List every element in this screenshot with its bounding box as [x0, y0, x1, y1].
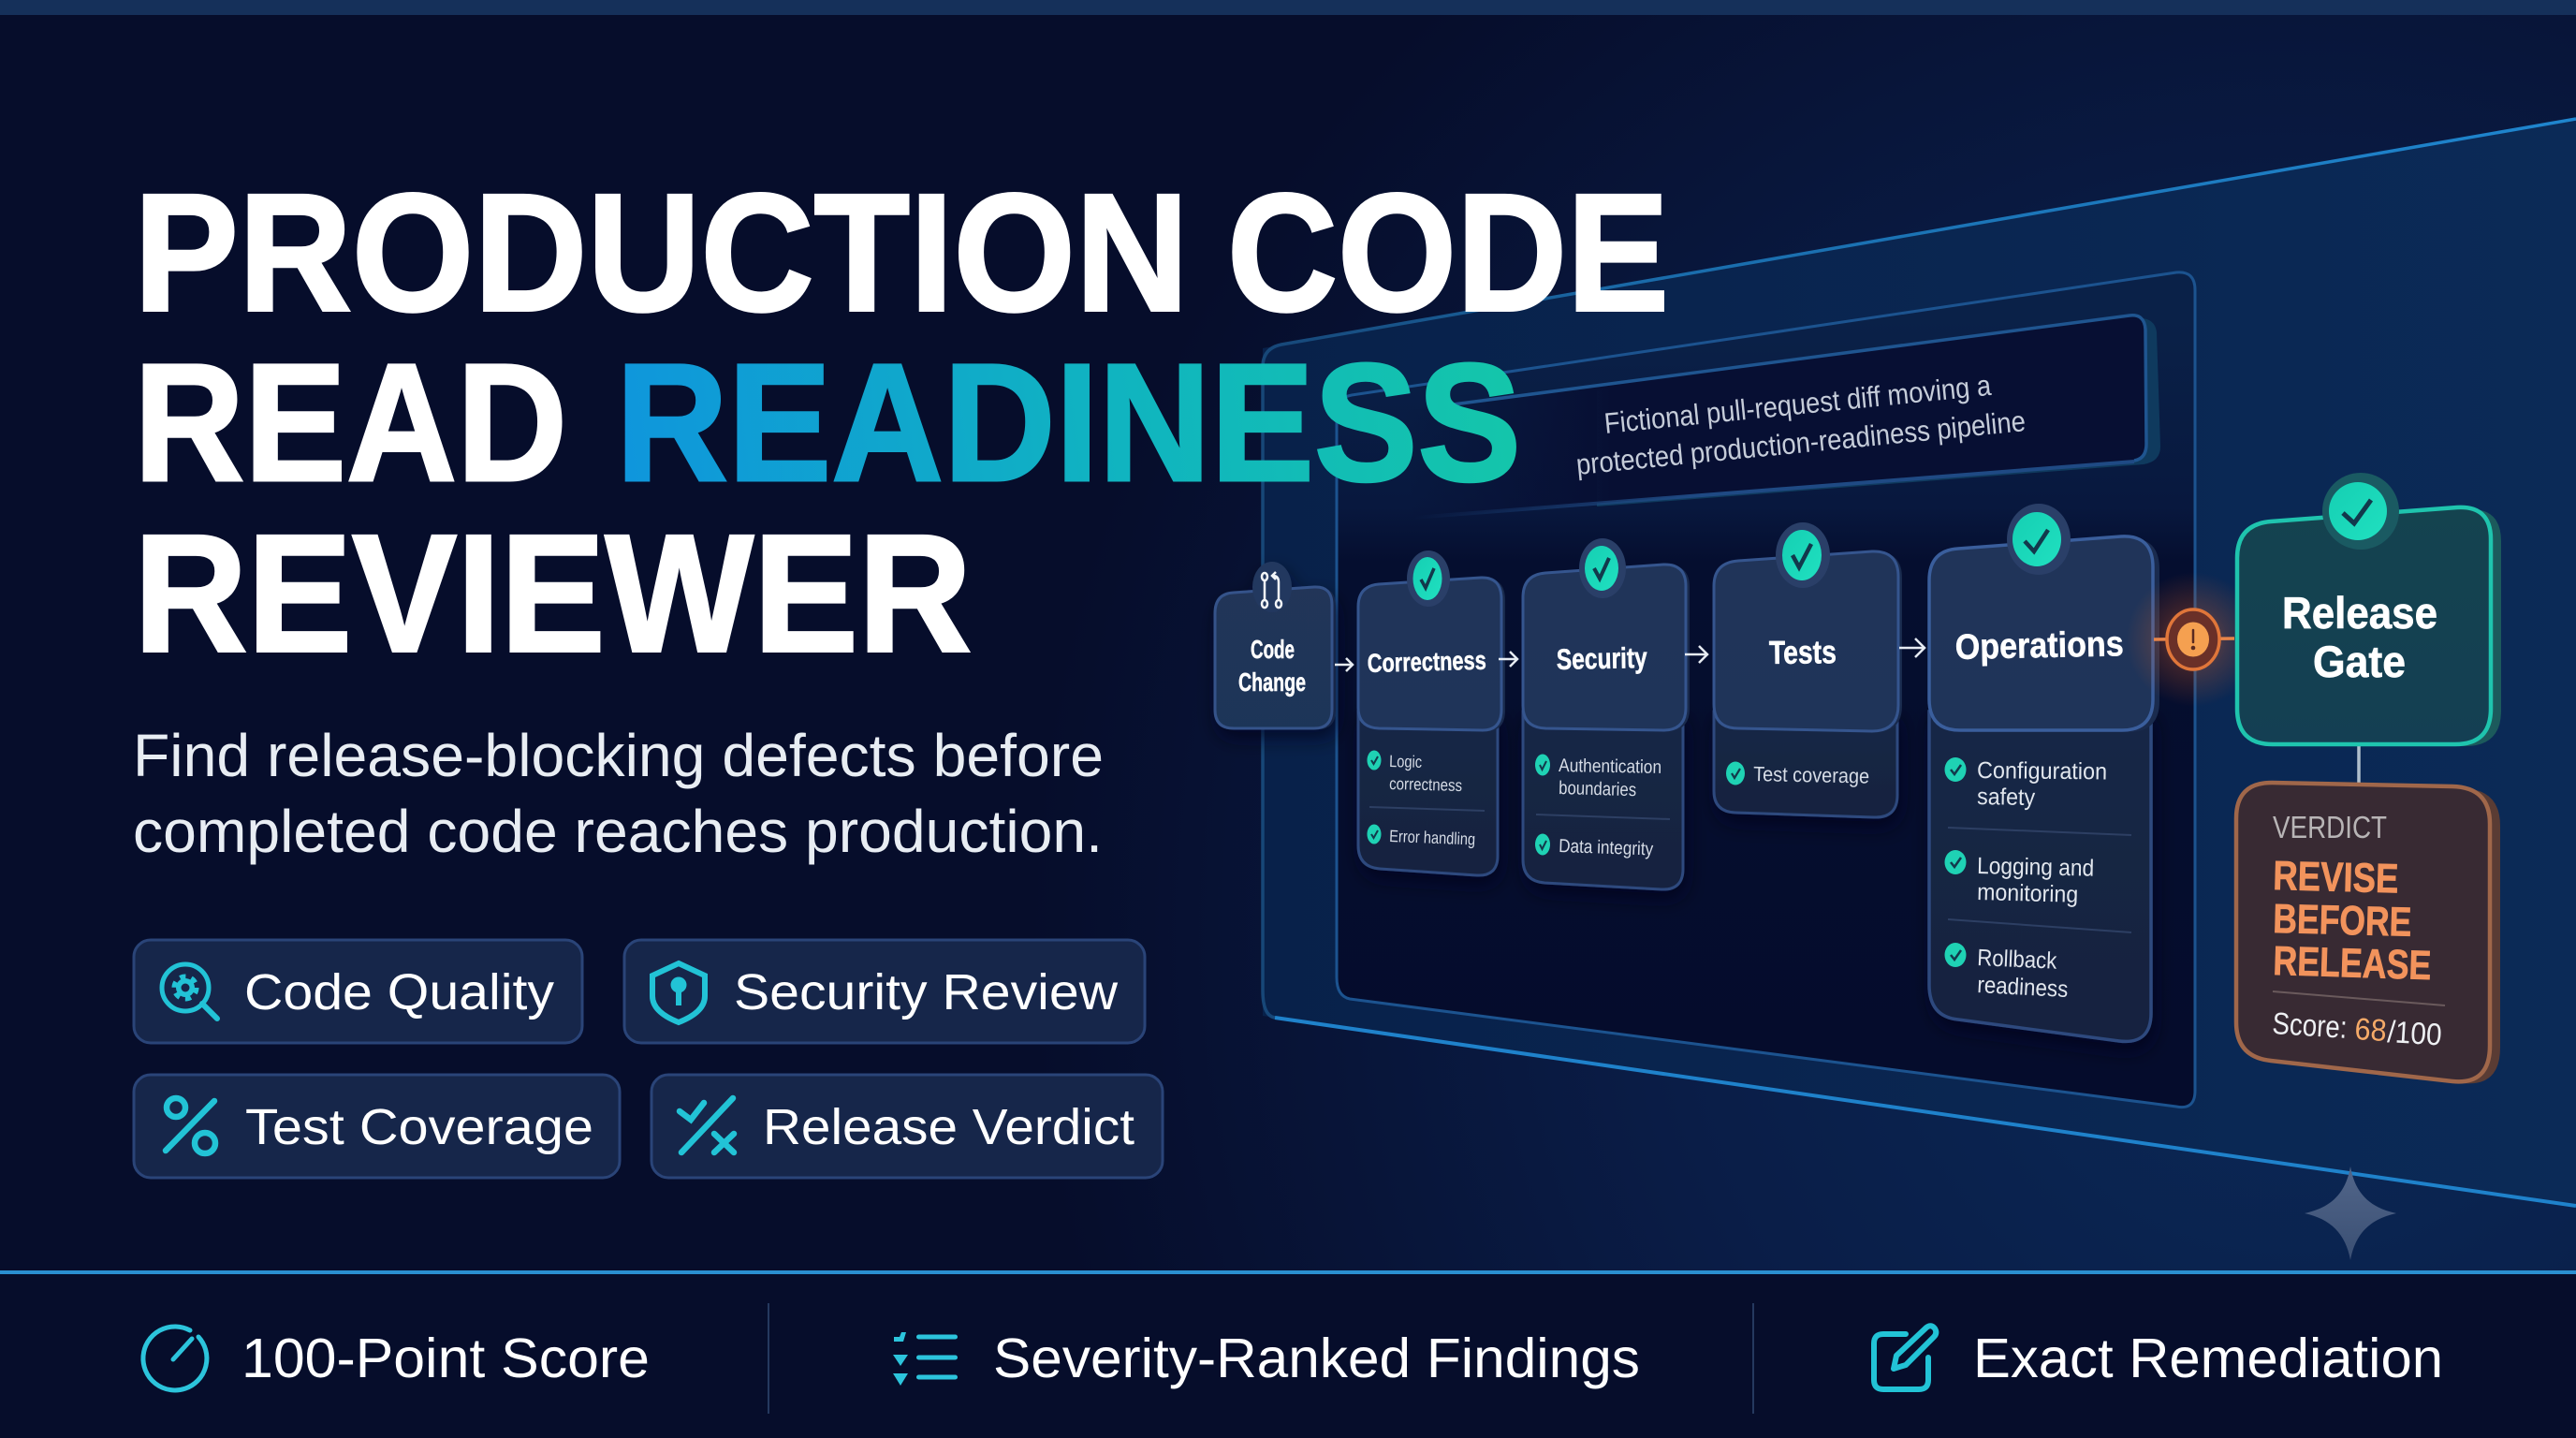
icon: score gauge	[143, 1327, 207, 1390]
stage: code change: Change	[1238, 668, 1306, 697]
arrow	[1499, 652, 1517, 667]
icon: severity list	[893, 1332, 958, 1386]
diff caption line 1: Fictional pull-request diff moving a	[1603, 369, 1993, 440]
checklist items	[1367, 751, 1485, 849]
checklist item: Test coverage	[1753, 762, 1869, 788]
chip: release verdict: Release Verdict	[763, 1099, 1134, 1155]
diff caption line 2: protected production-readiness pipeline	[1574, 404, 2027, 481]
connector gate to verdict	[2357, 744, 2361, 783]
chip: release verdict	[651, 1075, 1163, 1178]
stage: operations	[1929, 504, 2159, 1041]
release gate card	[2237, 473, 2501, 746]
title: PRODUCTION	[134, 159, 1189, 346]
check badge	[2322, 473, 2399, 550]
check badge	[1579, 538, 1626, 598]
tests checklist panel	[1714, 712, 1897, 817]
bottom bar: 100-Point Score	[242, 1328, 650, 1389]
security checklist panel	[1523, 712, 1683, 889]
title: READINESS	[616, 329, 1521, 516]
checklist items: Error handling	[1389, 827, 1476, 849]
stage: security: Security	[1556, 641, 1648, 676]
checklist items: boundaries	[1559, 778, 1636, 800]
operations header	[1929, 536, 2159, 732]
subtitle: completed code reaches production.	[133, 798, 1103, 865]
stage: tests: Tests	[1769, 634, 1837, 671]
checklist items: correctness	[1389, 774, 1462, 795]
stage: code change: Code	[1251, 635, 1295, 664]
release gate card: Gate	[2313, 637, 2406, 686]
stage: correctness	[1358, 550, 1505, 875]
icon: decorative sparkle star	[2305, 1167, 2396, 1260]
bottom bar: Severity-Ranked Findings	[993, 1328, 1640, 1389]
perspective backdrop plane	[1263, 119, 2576, 1206]
arrow	[1899, 638, 1925, 657]
stage: correctness: Correctness	[1367, 646, 1486, 678]
bottom bar	[0, 1270, 2576, 1438]
chip: security review: Security Review	[734, 964, 1119, 1020]
title: REVIEWER	[134, 500, 972, 687]
correctness checklist panel	[1358, 712, 1498, 875]
operations checklist panel	[1929, 712, 2151, 1041]
check badge	[1407, 550, 1450, 607]
tests header	[1714, 551, 1902, 732]
arrow	[1685, 646, 1707, 663]
checklist items: readiness	[1977, 972, 2069, 1003]
subtitle: Find release-blocking defects before	[133, 722, 1104, 789]
verdict score: Score:	[2272, 1005, 2349, 1045]
stage: tests	[1714, 522, 1902, 817]
check badge	[2007, 504, 2071, 575]
icon: git branch badge	[1252, 562, 1292, 612]
verdict headline: REVISE	[2273, 853, 2399, 902]
icon: check slash cross	[680, 1098, 734, 1152]
verdict score	[2272, 1005, 2443, 1052]
chip: code quality	[134, 940, 582, 1043]
chip: security review	[624, 940, 1145, 1043]
checklist items: Logic	[1389, 752, 1422, 771]
bottom bar: Exact Remediation	[1973, 1328, 2443, 1389]
subtitle	[133, 722, 1104, 865]
stage: operations: Operations	[1954, 624, 2124, 668]
icon: magnifier with gear	[162, 964, 217, 1019]
checklist items	[1945, 757, 2131, 1003]
checklist items: safety	[1977, 784, 2036, 811]
icon: edit pencil	[1874, 1326, 1936, 1389]
verdict score: /100	[2387, 1014, 2443, 1052]
checklist items: monitoring	[1977, 879, 2079, 908]
checklist items: Data integrity	[1559, 836, 1654, 860]
checklist items: Logging and	[1977, 853, 2094, 882]
warning indicator	[2126, 572, 2261, 707]
chip: test coverage	[134, 1075, 620, 1178]
inner pipeline frame	[1337, 272, 2195, 1108]
verdict card: VERDICT	[2273, 810, 2387, 844]
correctness header	[1358, 578, 1505, 731]
title	[134, 159, 1669, 687]
icon: percent	[166, 1098, 215, 1153]
checklist items: Authentication	[1559, 756, 1661, 778]
title: READ	[134, 329, 567, 516]
verdict headline: RELEASE	[2273, 938, 2432, 989]
stage: security	[1523, 538, 1690, 889]
icon: shield keyhole	[652, 963, 705, 1022]
arrow	[1335, 658, 1353, 671]
checklist items: Configuration	[1977, 757, 2107, 785]
security header	[1523, 565, 1690, 731]
verdict card	[2236, 783, 2500, 1083]
release gate card: Release	[2282, 588, 2437, 638]
fictional diff caption box	[1404, 315, 2160, 518]
checklist items	[1535, 755, 1670, 860]
check badge	[1776, 522, 1830, 588]
chip: test coverage: Test Coverage	[245, 1099, 593, 1155]
verdict headline	[2273, 853, 2432, 989]
chip: code quality: Code Quality	[244, 964, 554, 1020]
verdict headline: BEFORE	[2273, 896, 2412, 946]
checklist items: Rollback	[1977, 945, 2057, 975]
verdict score: 68	[2354, 1011, 2388, 1048]
title: CODE	[1227, 159, 1669, 346]
stage: code change	[1215, 562, 1336, 729]
